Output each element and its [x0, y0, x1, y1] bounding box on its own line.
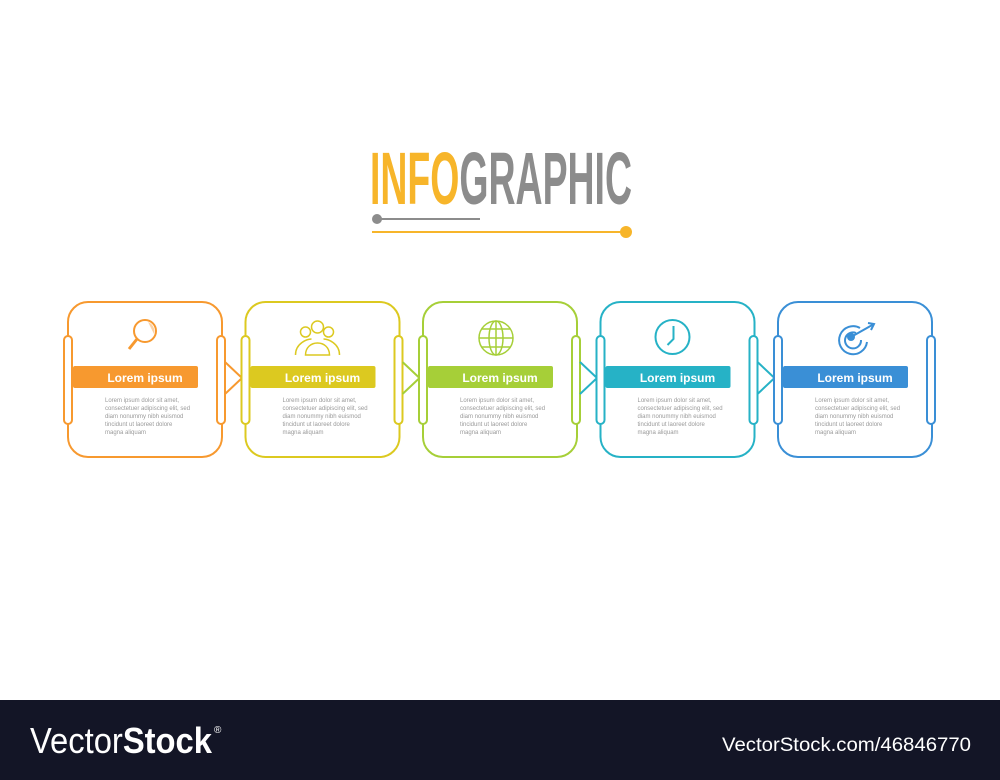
text block: tincidunt ut laoreet dolore — [105, 422, 173, 428]
text block — [105, 398, 190, 436]
text block: tincidunt ut laoreet dolore — [815, 422, 883, 428]
text block: consectetuer adipiscing elit, sed — [460, 406, 545, 412]
text block — [282, 398, 368, 436]
text block — [460, 398, 545, 436]
text block: Lorem ipsum dolor sit amet, — [815, 398, 889, 404]
banner — [428, 366, 553, 388]
text block: magna aliquam — [282, 430, 324, 436]
text block: Lorem ipsum dolor sit amet, — [460, 398, 534, 404]
text block: magna aliquam — [815, 430, 856, 436]
text block: tincidunt ut laoreet dolore — [282, 422, 351, 428]
panel: step 5 — [774, 302, 935, 457]
text block: magna aliquam — [105, 430, 146, 436]
title: INFOGRAPHIC — [370, 137, 632, 220]
footer — [0, 700, 1000, 780]
panel: step 1 — [64, 302, 242, 457]
icon: clock — [656, 320, 690, 354]
text block: Lorem ipsum dolor sit amet, — [282, 398, 357, 404]
text block: magna aliquam — [638, 430, 679, 436]
footer: VectorStock — [30, 720, 213, 761]
panel: step 4 — [596, 302, 774, 457]
text block: diam nonummy nibh euismod — [815, 414, 893, 420]
icon: target — [839, 323, 874, 354]
text block: tincidunt ut laoreet dolore — [638, 422, 706, 428]
panel: step 2 — [242, 302, 420, 457]
banner — [783, 366, 908, 388]
banner: Lorem ipsum — [462, 371, 538, 385]
text block: consectetuer adipiscing elit, sed — [282, 406, 368, 412]
title — [370, 137, 632, 238]
icon: globe — [479, 321, 513, 355]
text block: diam nonummy nibh euismod — [460, 414, 538, 420]
text block: Lorem ipsum dolor sit amet, — [105, 398, 179, 404]
text block — [815, 398, 900, 436]
banner: Lorem ipsum — [640, 371, 715, 385]
footer: ® — [214, 725, 222, 736]
banner — [73, 366, 198, 388]
banner — [606, 366, 730, 388]
icon: people — [296, 321, 340, 355]
text block: diam nonummy nibh euismod — [638, 414, 716, 420]
banner — [250, 366, 376, 388]
text block: diam nonummy nibh euismod — [105, 414, 183, 420]
text block: tincidunt ut laoreet dolore — [460, 422, 528, 428]
text block: Lorem ipsum dolor sit amet, — [638, 398, 712, 404]
text block: diam nonummy nibh euismod — [282, 414, 361, 420]
text block: consectetuer adipiscing elit, sed — [815, 406, 900, 412]
text block: magna aliquam — [460, 430, 501, 436]
panel: step 3 — [419, 302, 597, 457]
text block: consectetuer adipiscing elit, sed — [638, 406, 723, 412]
text block: consectetuer adipiscing elit, sed — [105, 406, 190, 412]
icon: search — [129, 320, 156, 349]
text block — [638, 398, 723, 436]
banner: Lorem ipsum — [285, 371, 360, 385]
banner: Lorem ipsum — [107, 371, 183, 385]
banner: Lorem ipsum — [817, 371, 893, 385]
footer: VectorStock.com/46846770 — [722, 735, 971, 756]
